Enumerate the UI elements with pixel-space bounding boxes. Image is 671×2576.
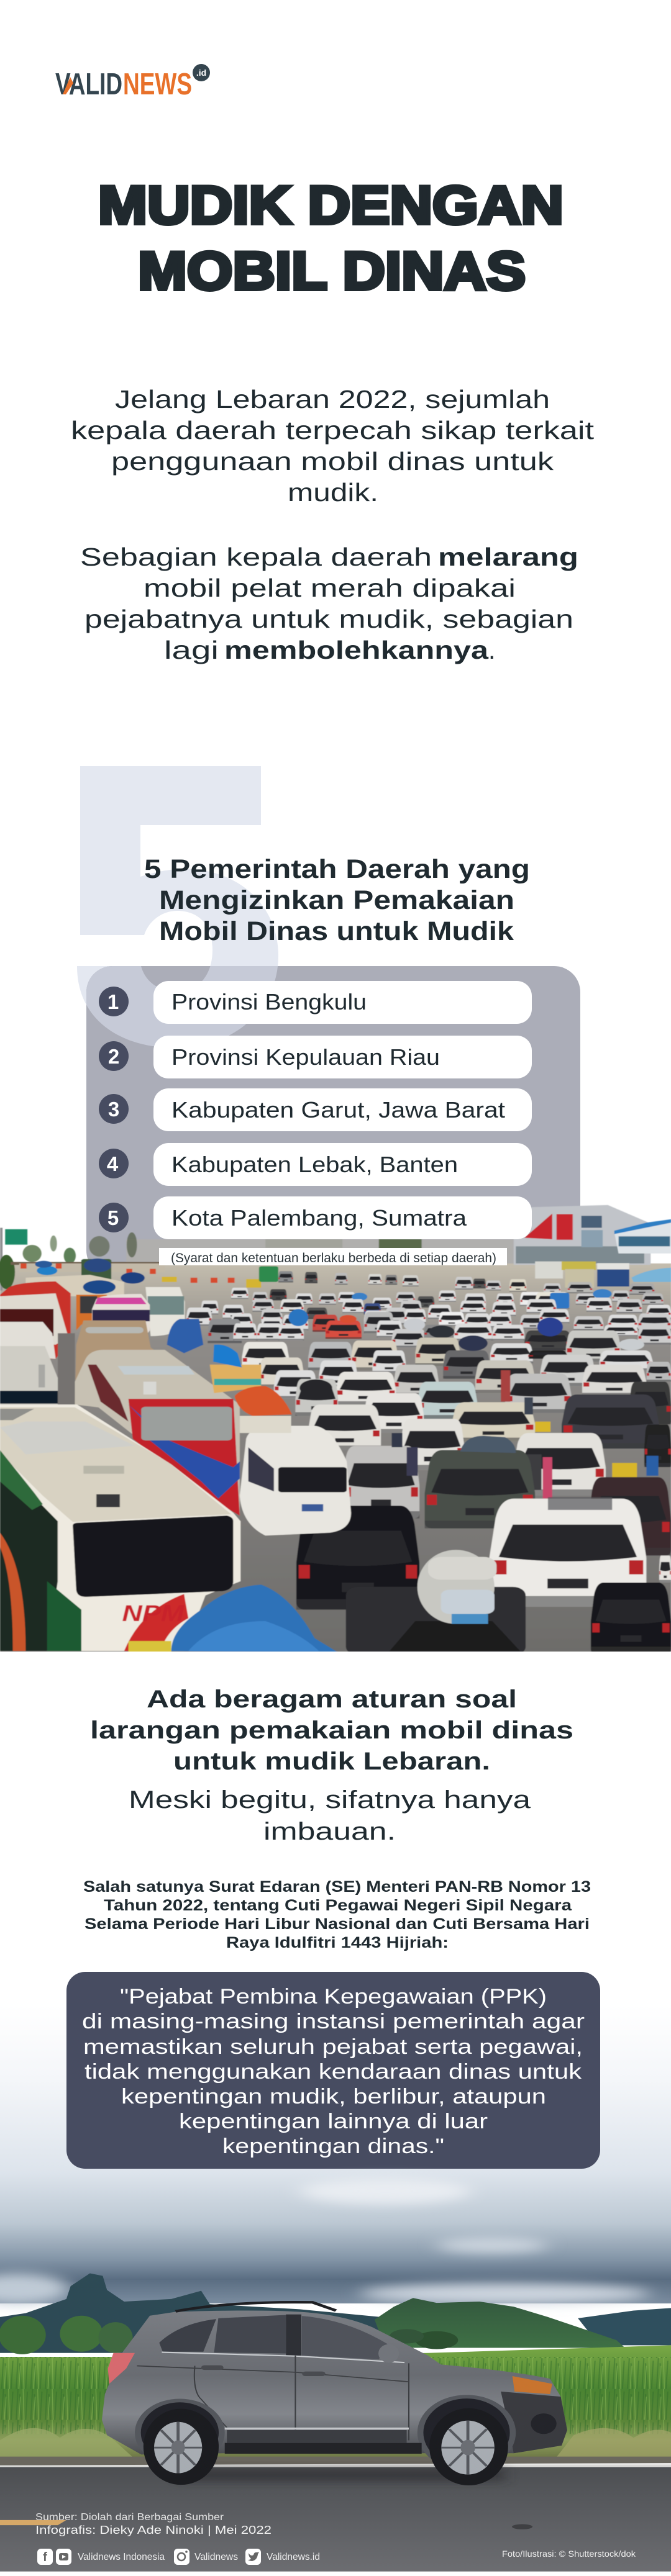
- quote box: [66, 1972, 600, 2169]
- surat edaran text: Salah satunya Surat Edaran (SE) Menteri PAN-RB Nomor 13: [83, 1878, 591, 1896]
- surat edaran text: Raya Idulfitri 1443 Hijriah:: [226, 1934, 449, 1951]
- intro text: mobil pelat merah dipakai: [144, 574, 516, 602]
- pill 5: Kota Palembang: [153, 1196, 532, 1239]
- note: terms: (Syarat dan ketentuan berlaku berbeda di setiap daerah): [171, 1251, 496, 1265]
- logo: Validnews.id: VALID: [55, 68, 122, 101]
- list heading: 5 Pemerintah Daerah yang: [144, 854, 530, 884]
- subhead: imbauan: Meski begitu, sifatnya hanya: [129, 1786, 531, 1814]
- surat edaran text: Tahun 2022, tentang Cuti Pegawai Negeri Sipil Negara: [104, 1897, 572, 1914]
- number badges 1 to 5: 2: [108, 1045, 119, 1068]
- photo credit: Foto/Ilustrasi: © Shutterstock/dok: [502, 2549, 636, 2559]
- car body: [102, 2302, 567, 2485]
- social: facebook and youtube: Validnews Indonesia: [78, 2552, 165, 2562]
- social: instagram: [174, 2549, 238, 2565]
- footer credits: Infografis: Dieky Ade Ninoki | Mei 2022: [35, 2524, 272, 2536]
- intro text: pejabatnya untuk mudik, sebagian: [84, 605, 573, 633]
- pill 1: Provinsi Bengkulu: Provinsi Bengkulu: [171, 989, 367, 1015]
- intro text: membolehkannya: [224, 636, 489, 664]
- list heading: [144, 854, 530, 946]
- skyline trees and sign: [0, 1228, 261, 1291]
- car crowd, far to near: [186, 1267, 671, 1655]
- intro text: Sebagian kepala daerah: [80, 543, 432, 571]
- logo: Validnews.id: NEWS: [123, 68, 192, 101]
- number badges 1 to 5: 1: [107, 990, 119, 1013]
- social: facebook and youtube: f: [43, 2551, 47, 2564]
- field: [0, 2345, 671, 2457]
- quote box: tidak menggunakan kendaraan dinas untuk: [84, 2060, 582, 2084]
- road: [0, 2457, 671, 2572]
- headline: aturan: [90, 1686, 573, 1775]
- list heading: Mengizinkan Pemakaian: [159, 885, 514, 915]
- quote box: kepentingan dinas.": [222, 2135, 444, 2158]
- subhead: imbauan: imbauan.: [263, 1818, 396, 1845]
- logo: Validnews.id: .id: [196, 68, 206, 78]
- red bus: [75, 1344, 292, 1516]
- headline: aturan: Ada beragam aturan soal: [147, 1686, 517, 1713]
- pill 2: Provinsi Kepulauan Riau: [153, 1036, 532, 1078]
- social: facebook and youtube: [37, 2549, 165, 2565]
- footer credits: [35, 2512, 272, 2536]
- near coach bus: NPM: [122, 1601, 185, 1626]
- van: [240, 1426, 351, 1535]
- quote box: "Pejabat Pembina Kepegawaian (PPK): [120, 1985, 547, 2009]
- photo: traffic jam at the port: [0, 1205, 671, 1655]
- surat edaran text: Selama Periode Hari Libur Nasional dan Cuti Bersama Hari: [84, 1915, 590, 1933]
- title: [98, 176, 564, 301]
- pill 3: Kabupaten Garut: Kabupaten Garut, Jawa Barat: [171, 1097, 505, 1123]
- pill 1: Provinsi Bengkulu: [153, 981, 532, 1024]
- headline: aturan: larangan pemakaian mobil dinas: [90, 1717, 573, 1744]
- photo: SUV on the road: [0, 2178, 671, 2572]
- surat edaran text: [83, 1878, 591, 1951]
- quote box: di masing-masing instansi pemerintah agar: [82, 2010, 585, 2033]
- social: instagram: Validnews: [194, 2552, 238, 2562]
- intro text: .: [488, 636, 495, 664]
- logo: Validnews.id: [55, 64, 210, 101]
- pill 5: Kota Palembang: Kota Palembang, Sumatra: [171, 1205, 467, 1231]
- intro text: kepala daerah terpecah sikap terkait: [71, 416, 595, 445]
- title: MOBIL DINAS: [138, 242, 526, 301]
- pill 2: Provinsi Kepulauan Riau: Provinsi Kepulauan Riau: [171, 1044, 440, 1070]
- number badges 1 to 5: [99, 987, 129, 1232]
- quote box: memastikan seluruh pejabat serta pegawai,: [83, 2035, 583, 2059]
- number badges 1 to 5: 5: [107, 1206, 119, 1229]
- quote box: kepentingan lainnya di luar: [179, 2110, 488, 2133]
- far left buses: [0, 1259, 203, 1404]
- footer credits: Sumber: Diolah dari Berbagai Sumber: [35, 2512, 224, 2523]
- title: MUDIK DENGAN: [98, 176, 564, 235]
- clouds and mountains: [0, 2178, 671, 2354]
- intro text: penggunaan mobil dinas untuk: [111, 447, 554, 476]
- terminal building: [514, 1205, 671, 1288]
- intro text: melarang: [438, 543, 578, 571]
- subhead: imbauan: [129, 1786, 531, 1845]
- list heading: Mobil Dinas untuk Mudik: [159, 916, 514, 946]
- quote box: kepentingan mudik, berlibur, ataupun: [121, 2085, 546, 2108]
- section background: sky fading from white: [0, 2005, 671, 2303]
- social: twitter: [245, 2549, 320, 2565]
- big number 5 seen through panel: [86, 966, 278, 1047]
- number badges 1 to 5: 4: [107, 1152, 119, 1175]
- panel: list background: [86, 966, 580, 1277]
- pill 4: Kabupaten Lebak: [153, 1143, 532, 1186]
- intro text: [71, 385, 595, 664]
- big number 5 background: [77, 766, 278, 1048]
- headline: aturan: untuk mudik Lebaran.: [173, 1748, 490, 1775]
- pill 4: Kabupaten Lebak: Kabupaten Lebak, Banten: [171, 1152, 458, 1177]
- number badges 1 to 5: 3: [108, 1098, 119, 1121]
- social: twitter: Validnews.id: [267, 2552, 320, 2562]
- pill 3: Kabupaten Garut: [153, 1088, 532, 1131]
- intro text: lagi: [164, 636, 219, 664]
- intro text: mudik.: [288, 478, 378, 507]
- near coach bus: [0, 1404, 338, 1652]
- intro text: Jelang Lebaran 2022, sejumlah: [115, 385, 550, 414]
